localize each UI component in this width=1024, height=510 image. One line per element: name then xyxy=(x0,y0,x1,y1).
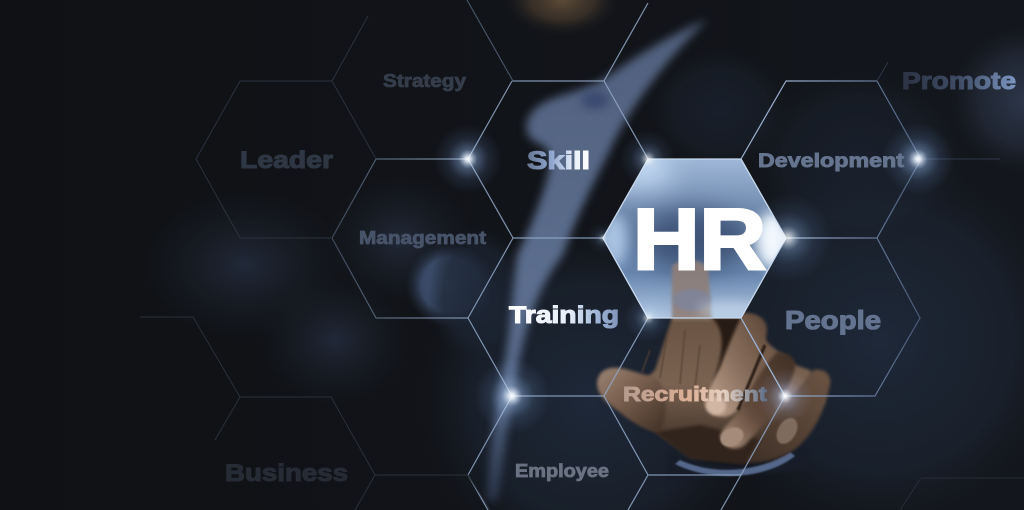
hexagons: Strategy right edge xyxy=(467,0,513,81)
shirt collar and placket xyxy=(487,20,707,500)
hexagons: Skill, Training, Recruitment, Employee xyxy=(468,3,785,510)
palm xyxy=(625,318,825,464)
label: HR: HR xyxy=(633,192,766,288)
label: Recruitment: Recruitment xyxy=(623,384,767,406)
hexagons: Leader and Strategy xyxy=(196,16,376,238)
label: Employee: Employee xyxy=(515,461,609,481)
light glows at hexagon vertices xyxy=(434,123,954,434)
label: Skill: Skill xyxy=(527,147,590,175)
label: People: People xyxy=(785,305,881,335)
hexagons: right fade xyxy=(877,62,1000,159)
label: Training: Training xyxy=(509,302,619,329)
head xyxy=(504,0,620,36)
ring finger xyxy=(720,352,795,448)
label: Management: Management xyxy=(359,228,486,248)
label: Business: Business xyxy=(225,460,348,487)
jacket cuff xyxy=(665,440,810,480)
shoulder blobs xyxy=(406,243,494,327)
middle finger xyxy=(705,313,767,417)
hexagons: People and Development xyxy=(741,81,921,396)
little finger xyxy=(745,370,830,462)
index finger through hexagon xyxy=(672,266,712,320)
thumb xyxy=(597,368,666,432)
label: Strategy: Strategy xyxy=(383,71,466,91)
label: Leader: Leader xyxy=(240,147,333,174)
hand pointing at HR xyxy=(597,266,830,480)
hexagons: Business xyxy=(140,317,490,510)
hexagons: Management xyxy=(332,159,468,318)
HR hexagon panel xyxy=(604,160,786,318)
label: Development: Development xyxy=(758,151,905,172)
label: Promote: Promote xyxy=(902,68,1016,95)
hexagons: HR outline xyxy=(603,159,786,318)
